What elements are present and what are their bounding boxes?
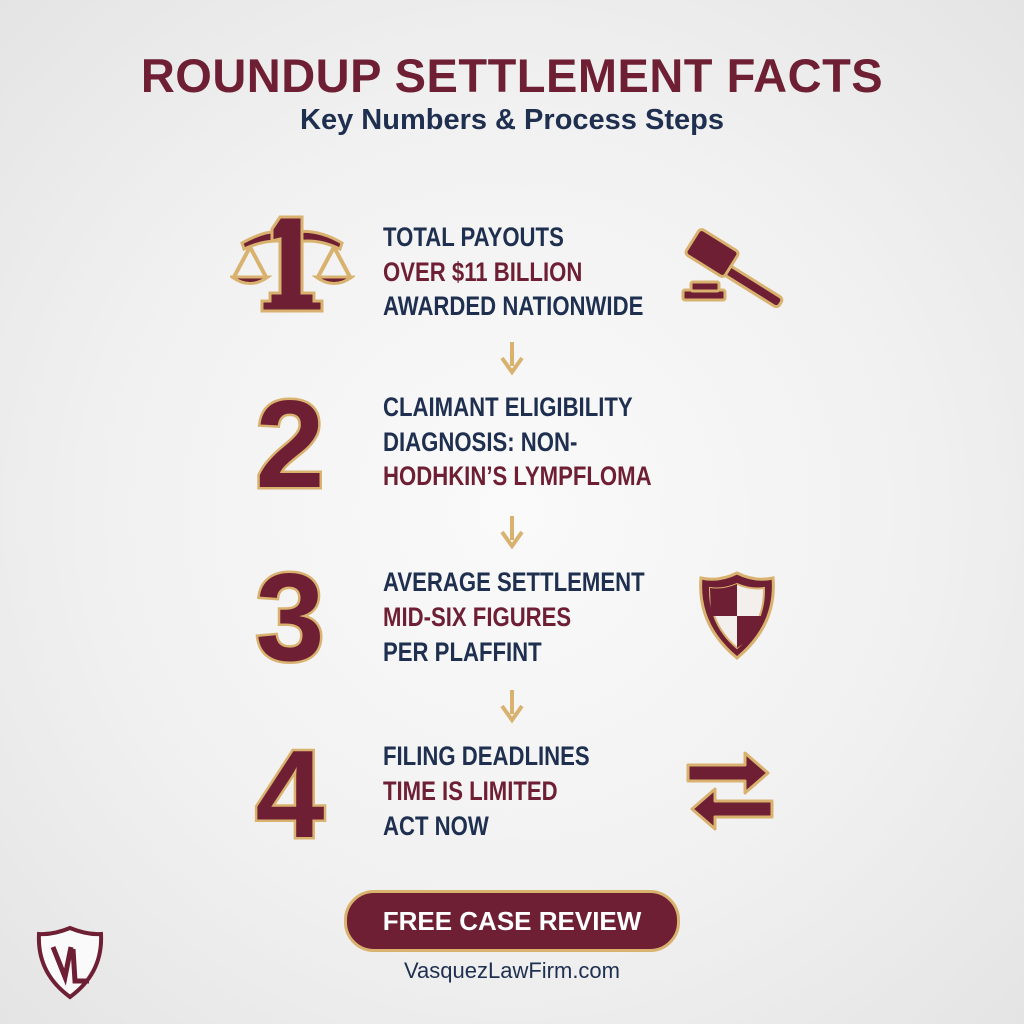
arrow 3	[500, 690, 524, 724]
step 1 number with scales	[230, 216, 355, 312]
text: average settlement: PER PLAFFINT	[383, 637, 542, 667]
button: free case review	[344, 890, 680, 952]
text: total payouts	[383, 222, 643, 321]
button: free case review: FREE CASE REVIEW	[383, 906, 641, 936]
text: total payouts: TOTAL PAYOUTS	[383, 222, 564, 252]
title: ROUNDUP SETTLEMENT FACTS	[141, 49, 883, 102]
step 4 number: 4	[256, 726, 324, 864]
text: filing deadlines: FILING DEADLINES	[383, 741, 590, 771]
text: average settlement: MID-SIX FIGURES	[383, 602, 571, 632]
step 2 number: 2	[256, 376, 324, 514]
step 3 number: 3	[256, 549, 324, 687]
arrow 1	[500, 342, 524, 376]
icon: shield	[699, 571, 775, 660]
logo: VL shield	[36, 926, 104, 1000]
icon: exchange arrows	[686, 752, 774, 831]
text: filing deadlines: TIME IS LIMITED	[383, 776, 558, 806]
text: claimant eligibility: CLAIMANT ELIGIBILITY	[383, 392, 633, 422]
arrow 2	[500, 516, 524, 550]
subtitle: Key Numbers & Process Steps	[300, 104, 724, 136]
icon: gavel	[682, 228, 784, 308]
website url: VasquezLawFirm.com	[404, 958, 620, 983]
text: claimant eligibility: DIAGNOSIS: NON-	[383, 427, 577, 457]
text: average settlement: AVERAGE SETTLEMENT	[383, 567, 645, 597]
text: filing deadlines	[383, 741, 590, 841]
text: claimant eligibility	[383, 392, 652, 491]
text: total payouts: OVER $11 BILLION	[383, 257, 582, 287]
text: average settlement	[383, 567, 645, 667]
text: claimant eligibility: HODHKIN’S LYMPFLOMA	[383, 461, 652, 491]
text: filing deadlines: ACT NOW	[383, 811, 489, 841]
text: total payouts: AWARDED NATIONWIDE	[383, 291, 643, 321]
